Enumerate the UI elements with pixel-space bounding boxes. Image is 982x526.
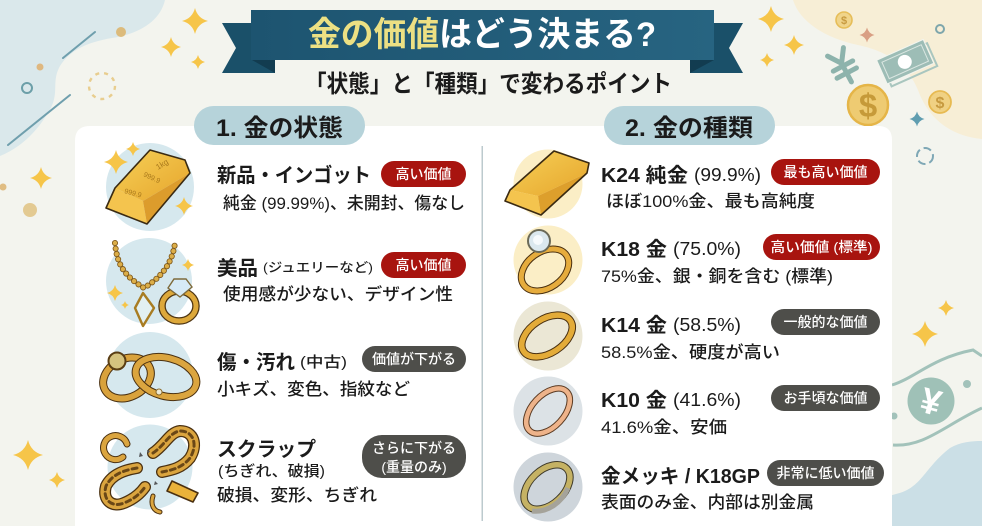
value badge: 非常に低い価値 <box>776 465 874 481</box>
row: good jewelry <box>106 238 466 326</box>
icon: plated ring <box>514 452 582 522</box>
name: K24 純金 <box>601 164 688 187</box>
decorations: top left <box>0 8 208 488</box>
heading: 2. type: 2. 金の種類 <box>625 115 753 142</box>
description: 使用感が少ない、デザイン性 <box>223 284 453 304</box>
value badge <box>767 460 884 486</box>
purity: (41.6%) <box>673 390 741 410</box>
purity: (58.5%) <box>673 315 741 335</box>
row: K18 <box>513 226 880 300</box>
title text: 金の価値はどう決まる? <box>308 16 656 54</box>
value badge: 最も高い価値 <box>784 164 868 180</box>
name: スクラップ <box>217 438 316 461</box>
decorations: bottom right banknote: ¥ <box>916 379 946 424</box>
decorations: top right money <box>758 6 951 164</box>
icon: rose gold ring <box>514 376 582 446</box>
value badge: 高い価値 (標準) <box>770 239 872 255</box>
description: 破損、変形、ちぎれ <box>217 486 377 505</box>
background blob: bottom right <box>854 441 982 526</box>
heading: 1. condition <box>194 106 365 145</box>
icon: diamond ring <box>513 226 582 300</box>
qualifier: (ちぎれ、破損) <box>218 463 325 480</box>
row: new ingot <box>104 142 466 231</box>
description: ほぼ100%金、最も高純度 <box>606 192 815 211</box>
value badge: 高い価値 <box>396 166 452 182</box>
value badge: 高い価値 <box>396 257 452 273</box>
row: scrap <box>104 424 466 512</box>
icon: gold bar <box>505 150 589 218</box>
title banner <box>222 10 743 73</box>
qualifier: (中古) <box>300 354 347 371</box>
icon: broken chain <box>104 424 198 512</box>
decorations: top right money: $ <box>936 95 945 112</box>
name: 美品 <box>217 257 258 280</box>
value badge <box>763 234 880 260</box>
value badge: さらに下がる <box>372 440 456 456</box>
purity: (99.9%) <box>694 165 761 185</box>
name: K14 金 <box>601 314 667 337</box>
heading: 2. type <box>604 106 775 145</box>
description: 純金 (99.99%)、未開封、傷なし <box>223 194 465 213</box>
background blob: top right <box>793 0 982 139</box>
value badge <box>381 252 466 278</box>
background blob: top left <box>0 0 165 156</box>
icon: gold ingot <box>104 142 194 231</box>
description: 58.5%金、硬度が高い <box>601 342 780 362</box>
icon: gold ingot: 999.9 <box>123 188 142 199</box>
name: 傷・汚れ <box>217 351 295 374</box>
name: K18 金 <box>601 238 667 261</box>
icon: worn rings <box>96 332 201 418</box>
row: gold plated <box>514 452 884 522</box>
icon: necklace and ring <box>106 238 196 326</box>
qualifier: (ジュエリーなど) <box>263 260 373 275</box>
row: K24 <box>505 150 880 218</box>
value badge: (重量のみ) <box>381 459 447 475</box>
decorations: top right money: $ <box>841 15 847 27</box>
value badge <box>381 161 466 187</box>
icon: gold ingot: 999.9 <box>142 171 161 185</box>
purity: (75.0%) <box>673 239 741 259</box>
value badge <box>771 159 880 185</box>
decorations: bottom right banknote <box>890 300 982 445</box>
description: 75%金、銀・銅を含む (標準) <box>601 267 833 286</box>
value badge <box>771 385 880 411</box>
value badge <box>362 435 466 478</box>
value badge: お手頃な価値 <box>784 390 868 406</box>
subtitle: 「状態」と「種類」で変わるポイント <box>305 71 672 98</box>
heading: 1. condition: 1. 金の状態 <box>216 115 343 142</box>
name: 金メッキ / K18GP <box>601 465 760 488</box>
icon: gold ingot: 1kg <box>154 157 170 172</box>
value badge <box>771 309 880 335</box>
row: K10 <box>514 376 880 446</box>
name: K10 金 <box>601 389 667 412</box>
white content panel <box>75 126 892 526</box>
value badge: 価値が下がる <box>372 351 456 367</box>
description: 41.6%金、安価 <box>601 418 727 437</box>
decorations: top right money: $ <box>859 87 877 124</box>
icon: gold ring <box>514 302 582 370</box>
row: K14 <box>514 302 880 370</box>
row: scratched <box>96 332 466 418</box>
value badge: 一般的な価値 <box>784 314 868 330</box>
description: 小キズ、変色、指紋など <box>217 379 410 399</box>
description: 表面のみ金、内部は別金属 <box>601 493 814 512</box>
name: 新品・インゴット <box>217 163 371 187</box>
value badge <box>362 346 466 372</box>
